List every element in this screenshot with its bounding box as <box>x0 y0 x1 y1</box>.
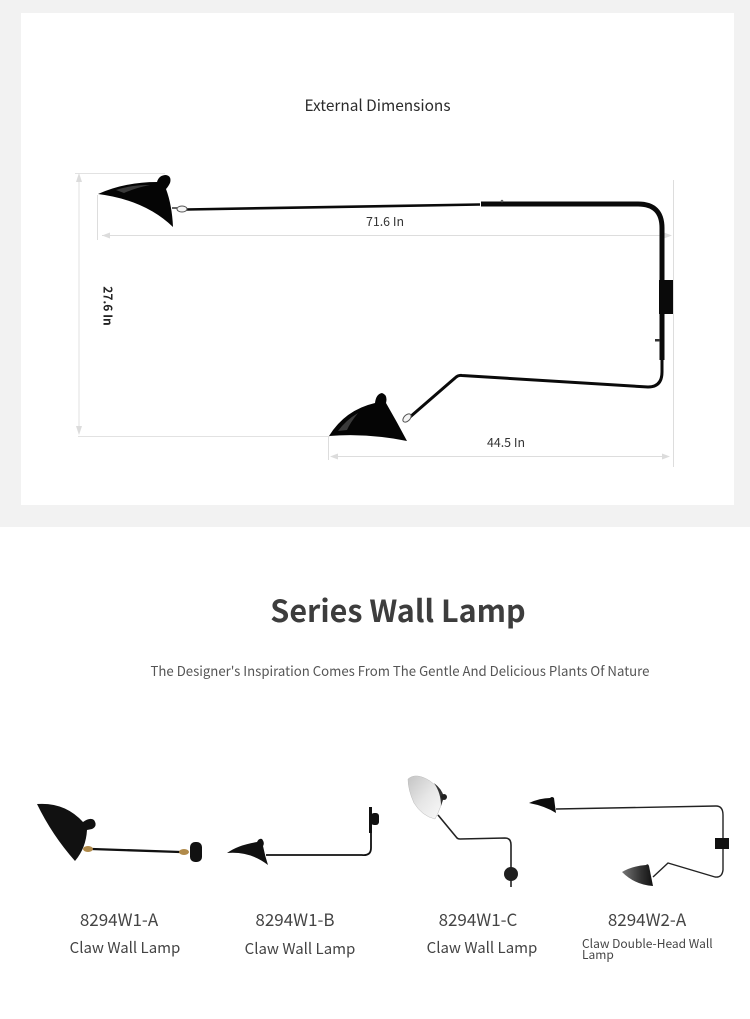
dimension: reach 44.5 in: 44.5 In <box>487 433 525 451</box>
dimension: height 27.6 in: 27.6 In <box>100 286 116 326</box>
subtitle: The Designer's Inspiration Comes From The Gentle And Delicious Plants Of Nature <box>151 661 649 680</box>
panel: external dimensions <box>21 13 734 505</box>
model B: 8294W1-B <box>255 906 335 931</box>
product: 8294W1-A <box>37 804 202 958</box>
lamp image B <box>227 807 379 865</box>
product: 8294W2-A <box>529 797 729 963</box>
diagram: double-arm wall lamp <box>98 175 673 441</box>
wall plate <box>659 280 673 314</box>
model A: 8294W1-A <box>80 906 159 931</box>
product: 8294W1-C <box>408 776 537 958</box>
dimension: height 27.6 in <box>75 173 330 436</box>
model D: 8294W2-A <box>608 906 687 931</box>
upper arm <box>186 204 480 210</box>
product: 8294W1-B <box>227 807 379 959</box>
lower shade <box>329 393 407 441</box>
name B: Claw Wall Lamp <box>245 938 355 959</box>
name D <box>582 935 713 963</box>
lamp image A <box>37 804 202 862</box>
dimension: reach 44.5 in <box>328 433 670 460</box>
name A: Claw Wall Lamp <box>70 937 180 958</box>
name D: Claw Double-Head Wall <box>582 935 713 952</box>
dimension: width 71.6 in <box>98 180 674 467</box>
lamp image D <box>529 797 729 886</box>
dimension: width 71.6 in: 71.6 In <box>366 212 404 230</box>
name C: Claw Wall Lamp <box>427 937 537 958</box>
name D: Lamp <box>582 946 614 963</box>
upper shade <box>98 175 173 227</box>
lamp image C <box>408 776 518 887</box>
heading: external dimensions: External Dimensions <box>304 94 451 116</box>
model C: 8294W1-C <box>439 906 518 931</box>
title: Series Wall Lamp <box>270 587 526 631</box>
lower arm <box>410 360 662 417</box>
